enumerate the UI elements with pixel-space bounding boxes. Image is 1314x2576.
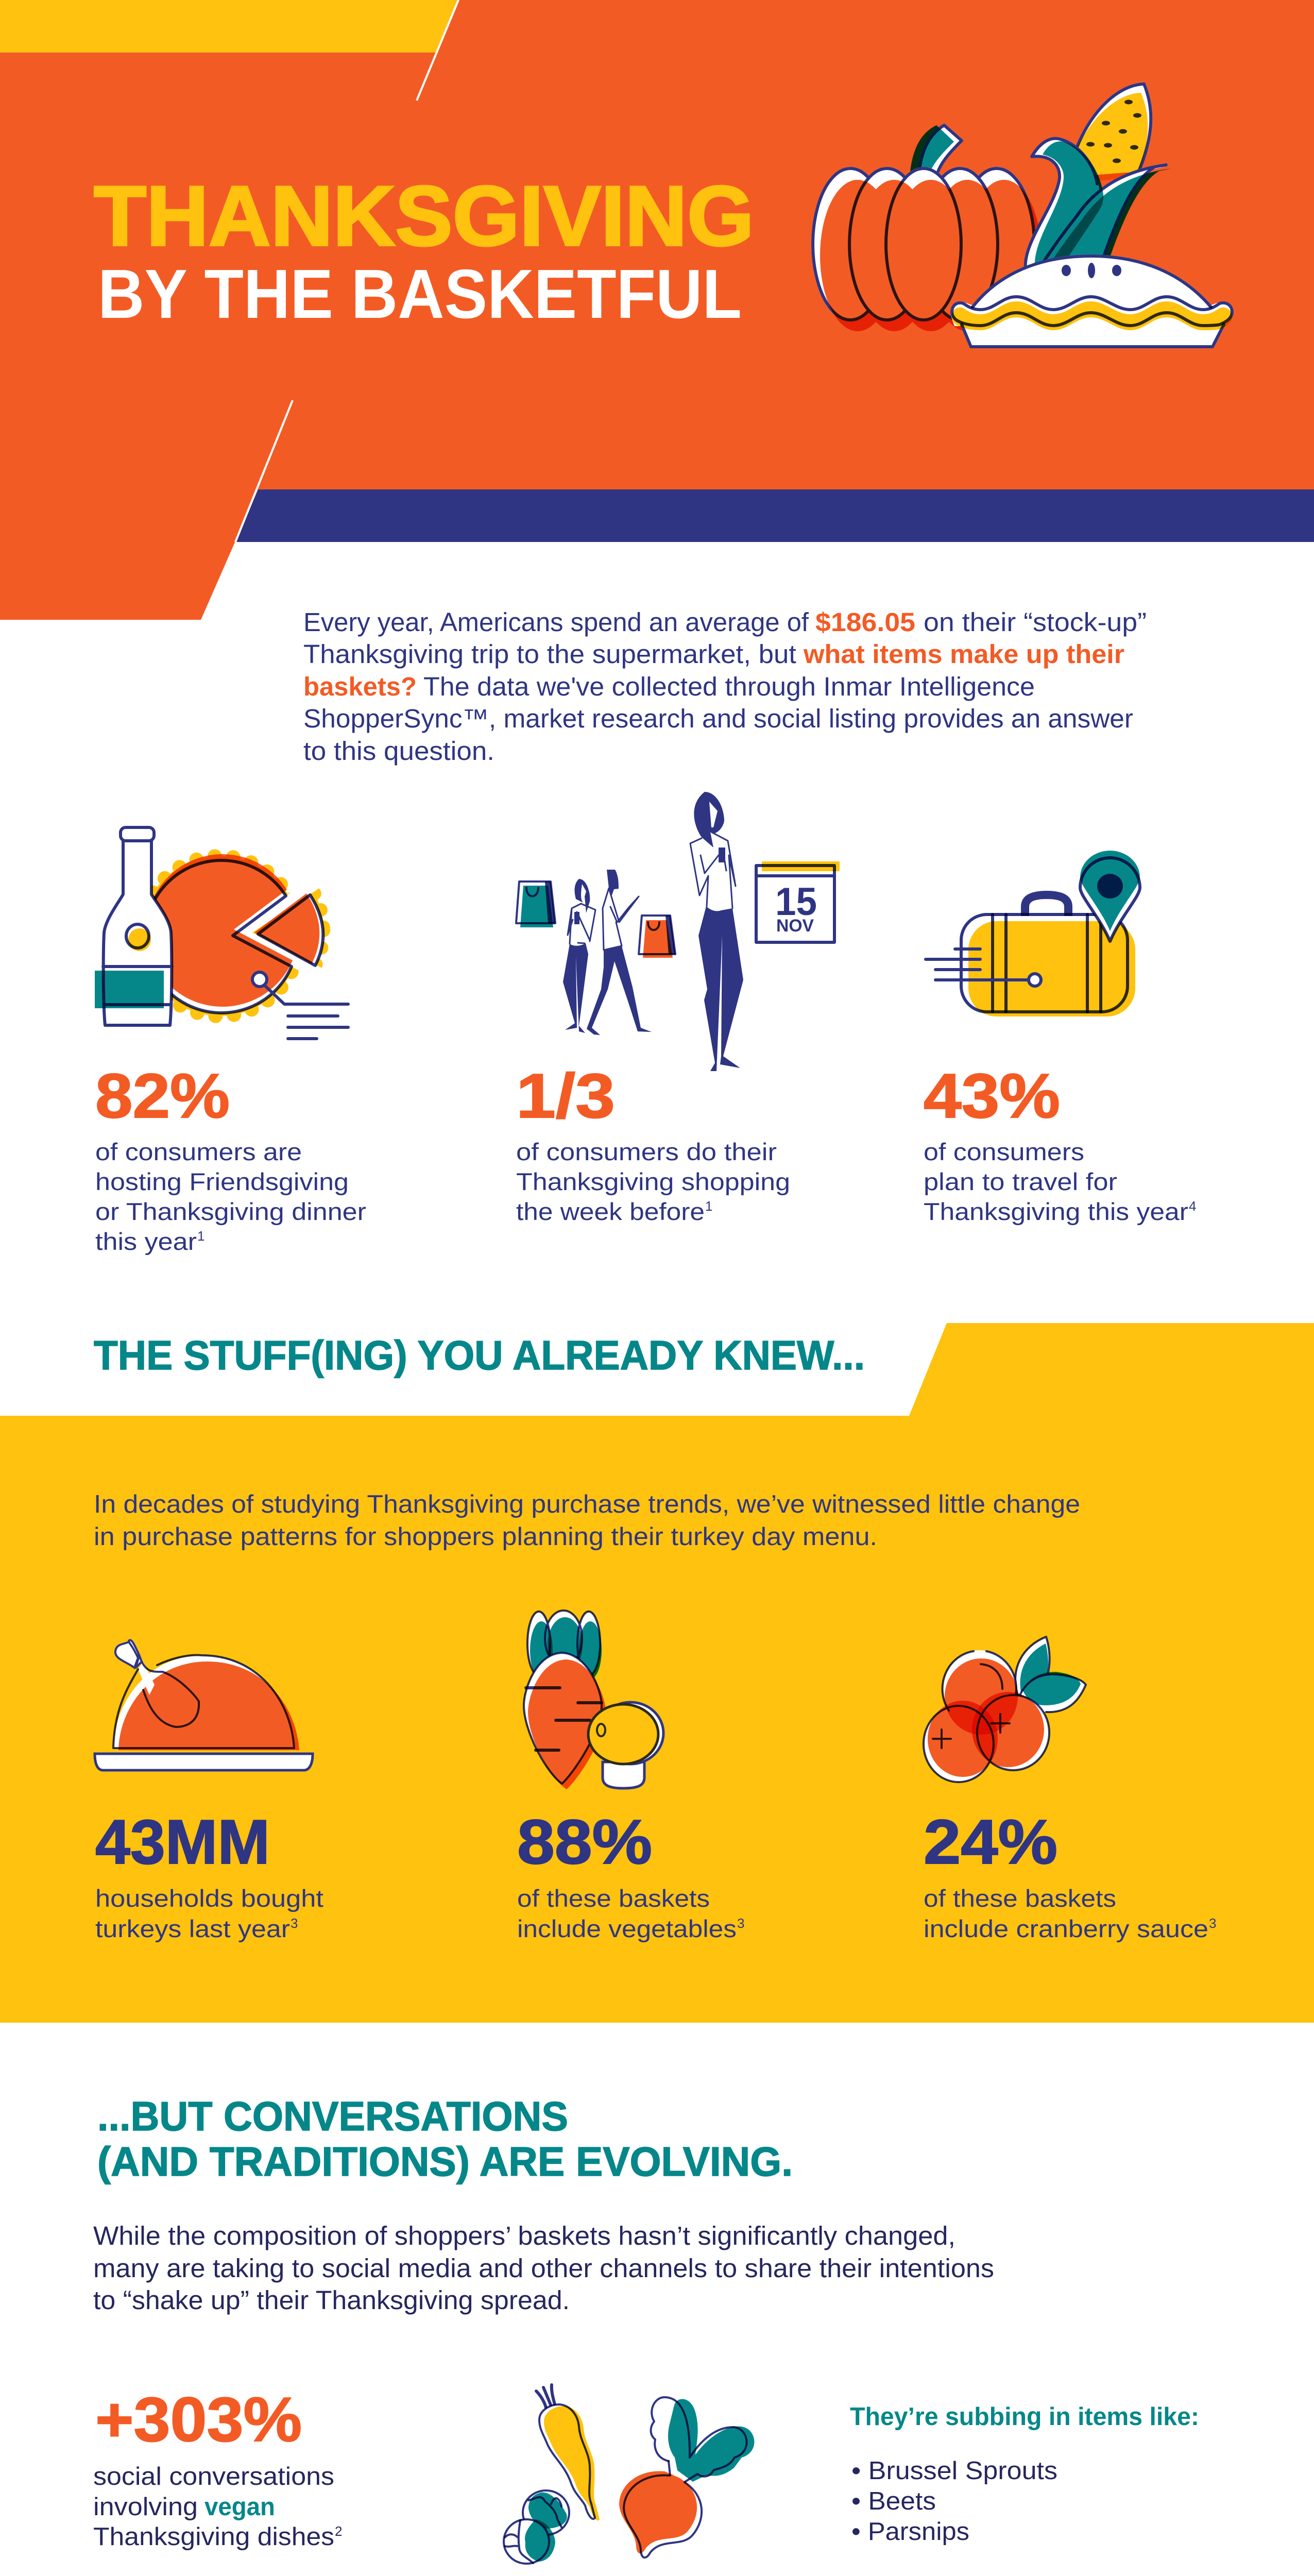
stat: 43MM: households bought (95, 1885, 323, 1912)
row: vegan +303%: social conversations (93, 2463, 334, 2490)
panel: the stuffing you already knew (0, 1323, 1314, 2023)
intro paragraph: Every year, Americans spend an average of (303, 607, 809, 637)
list: vegan items: • Parsnips (851, 2518, 969, 2546)
panel: hero banner (0, 0, 1314, 620)
stat: 43MM: turkeys last year (95, 1915, 290, 1942)
icon: shoppers and calendar (516, 792, 840, 1071)
stat: 82%: hosting Friendsgiving (95, 1168, 349, 1195)
stat: 43MM (95, 1807, 323, 1942)
panel: conversations are evolving (0, 2093, 1314, 2576)
paragraph: in purchase patterns for shoppers planning their turkey day menu. (94, 1523, 877, 1551)
intro paragraph: to this question. (303, 736, 494, 766)
icon: parsnip, beet and sprouts (504, 2385, 754, 2564)
panel: opening stats (95, 792, 1196, 1255)
stat: 1/3: Thanksgiving shopping (516, 1168, 790, 1195)
stat: 88%: 88% (517, 1807, 652, 1877)
stat: 43%: plan to travel for (924, 1168, 1117, 1195)
list: vegan items: They’re subbing in items like: (850, 2403, 1199, 2431)
icon: carrot and mushroom (524, 1611, 663, 1789)
title (94, 168, 754, 333)
stat: 43% (924, 1061, 1196, 1225)
intro paragraph: Thanksgiving trip to the supermarket, but (303, 639, 796, 669)
stat: 88%: of these baskets (517, 1885, 710, 1912)
stat: 82% (95, 1061, 366, 1255)
icon: suitcase and map pin (926, 851, 1140, 1016)
stat: 43MM: 43MM (95, 1807, 270, 1877)
paragraph: many are taking to social media and other channels to share their intentions (93, 2253, 994, 2283)
paragraph: to “shake up” their Thanksgiving spread. (93, 2285, 570, 2315)
list: vegan items: • Brussel Sprouts (851, 2457, 1057, 2485)
intro paragraph (303, 607, 1147, 766)
stat: 43%: of consumers (924, 1138, 1084, 1165)
paragraph: In decades of studying Thanksgiving purchase trends, we’ve witnessed little change (94, 1490, 1080, 1518)
row: vegan +303%: +303% (95, 2384, 302, 2454)
intro paragraph: ShopperSync™, market research and social listing provides an answer (303, 704, 1133, 733)
row: vegan +303%: involving (93, 2493, 198, 2521)
intro paragraph: on their “stock-up” (924, 607, 1147, 637)
paragraph: While the composition of shoppers’ baskets hasn’t significantly changed, (93, 2221, 955, 2250)
stat: 1/3 (516, 1061, 790, 1225)
stat: 24% (924, 1807, 1216, 1942)
row: vegan +303%: 2 (335, 2523, 342, 2539)
stat: 82%: 1 (197, 1228, 204, 1244)
icon: pie (952, 256, 1232, 347)
icon: wine bottle and pie (95, 827, 348, 1039)
heading: ...BUT CONVERSATIONS (97, 2093, 568, 2139)
stat: 43%: 43% (924, 1061, 1060, 1131)
stat: 88% (517, 1807, 744, 1942)
stat: 24%: of these baskets (924, 1885, 1116, 1912)
stat: 82%: 82% (95, 1061, 230, 1131)
intro paragraph: baskets? (303, 672, 417, 701)
stat: 1/3: the week before (516, 1198, 705, 1225)
row: vegan +303%: vegan (204, 2493, 275, 2521)
stat: 88%: 3 (737, 1916, 744, 1931)
paragraph (93, 2221, 994, 2315)
stat: 1/3: 1 (705, 1198, 712, 1214)
yellow panel background (0, 1323, 1314, 2023)
icon: cranberries (924, 1637, 1086, 1782)
navy band (235, 489, 1314, 542)
icon: corn (1026, 84, 1171, 274)
stat: 24%: 3 (1209, 1916, 1216, 1931)
stat: 24%: 24% (924, 1807, 1057, 1877)
intro paragraph: what items make up their (803, 639, 1124, 669)
stat: 1/3: 1/3 (516, 1061, 615, 1131)
stat: 82%: of consumers are (95, 1138, 302, 1165)
stat: 1/3: of consumers do their (516, 1138, 777, 1165)
list: vegan items: • Beets (851, 2487, 936, 2515)
heading: THE STUFF(ING) YOU ALREADY KNEW... (94, 1332, 865, 1378)
heading: (AND TRADITIONS) ARE EVOLVING. (97, 2139, 793, 2184)
intro paragraph: The data we've collected through Inmar Intelligence (423, 672, 1035, 701)
paragraph (94, 1490, 1080, 1551)
intro paragraph: $186.05 (815, 607, 915, 637)
icon: pumpkin (813, 125, 1042, 331)
yellow corner band (0, 0, 458, 53)
icon: shoppers and calendar: NOV (776, 916, 814, 936)
list: vegan items (850, 2403, 1199, 2546)
row: vegan +303%: Thanksgiving dishes (93, 2523, 334, 2551)
orange background shape (0, 0, 1314, 620)
icon: shoppers and calendar: 15 (775, 880, 817, 924)
row: vegan +303% (93, 2384, 342, 2551)
title: BY THE BASKETFUL (98, 255, 742, 333)
stat: 82%: this year (95, 1228, 197, 1255)
icon: turkey (95, 1640, 313, 1770)
heading (97, 2093, 793, 2184)
stat: 43%: Thanksgiving this year (924, 1198, 1188, 1225)
stat: 82%: or Thanksgiving dinner (95, 1198, 366, 1225)
stat: 24%: include cranberry sauce (924, 1915, 1208, 1942)
stat: 43MM: 3 (291, 1916, 298, 1931)
stat: 88%: include vegetables (517, 1915, 737, 1942)
title: THANKSGIVING (94, 168, 754, 263)
stat: 43%: 4 (1189, 1198, 1196, 1214)
